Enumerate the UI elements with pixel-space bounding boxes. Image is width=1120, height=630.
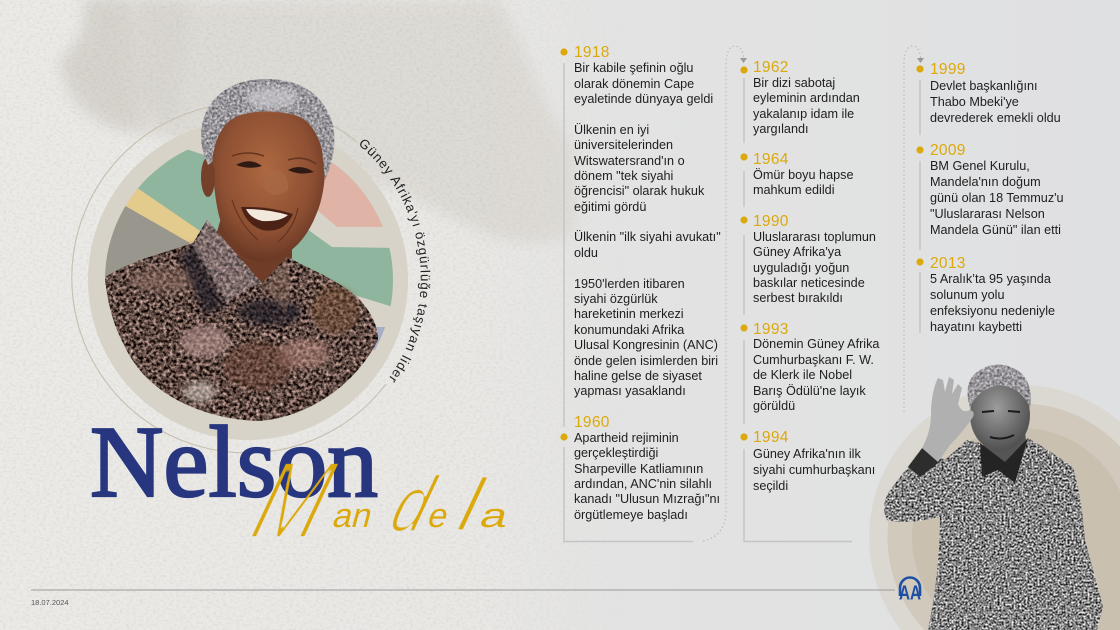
hair [968, 364, 1031, 408]
timeline column 1 text: gerçekleştirdiği [574, 446, 658, 460]
body [884, 438, 1103, 630]
timeline column 1 text: Ulusal Kongresinin (ANC) [574, 338, 718, 352]
timeline column 3 text: Devlet başkanlığını [930, 79, 1038, 93]
timeline column 2 text: görüldü [753, 399, 795, 413]
icon: AA logo [899, 578, 921, 604]
shirt [105, 220, 378, 421]
timeline column 2 text: baskılar neticesinde [753, 276, 865, 290]
timeline column 1 text: örgütlemeye başladı [574, 508, 688, 522]
hand [922, 377, 974, 462]
timeline column 1 text: Ülkenin "ilk siyahi avukatı" [574, 230, 721, 244]
timeline column 2 text: serbest bırakıldı [753, 291, 843, 305]
timeline column 3 text [930, 61, 1064, 334]
shirt patches [129, 243, 359, 403]
beige disc [88, 120, 408, 440]
timeline column 2 text: Bir dizi sabotaj [753, 76, 835, 90]
footer rule [31, 590, 895, 591]
timeline column 2 text: 1962 [753, 59, 789, 76]
portrait: Nelson Mandela smiling [105, 79, 378, 421]
smile [241, 207, 293, 231]
timeline column 3 connectors [904, 46, 924, 412]
timeline column 1 text: haline gelse de siyaset [574, 369, 702, 383]
timeline column 2 text: 1993 [753, 321, 789, 338]
timeline column 1 text: önde gelen isimlerden biri [574, 354, 718, 368]
timeline column 1 text: olarak dönemin Cape [574, 77, 694, 91]
timeline column 1 text: yapması yasaklandı [574, 384, 686, 398]
thin outer ring [72, 103, 386, 453]
neck [982, 425, 1026, 470]
timeline column 1 text: 1960 [574, 414, 610, 431]
hair highlight [246, 87, 298, 109]
title: Mandela: l [444, 463, 500, 546]
timeline column 1 text: Apartheid rejiminin [574, 431, 679, 445]
timeline column 2 text: yakalanıp idam ile [753, 107, 854, 121]
timeline column 1 text: öğrencisi" olarak hukuk [574, 184, 705, 198]
timeline column 1 connectors [560, 46, 747, 542]
timeline column 1 text: eyaletinde dünyaya geldi [574, 92, 713, 106]
title: Mandela: a [476, 496, 514, 534]
timeline column 3 text: günü olan 18 Temmuz'u [930, 191, 1064, 205]
eyes and brows [236, 161, 262, 168]
timeline column 2 text: eyleminin ardından [753, 91, 860, 105]
timeline column 2 text: seçildi [753, 479, 788, 493]
timeline column 1 text: dönem "tek siyahi [574, 169, 673, 183]
timeline column 2 text: Cumhurbaşkanı F. W. [753, 353, 874, 367]
neck [208, 215, 292, 290]
timeline column 3 text: "Uluslararası Nelson [930, 207, 1045, 221]
head [970, 379, 1030, 451]
hair [201, 79, 334, 180]
photo: Mandela waving [884, 364, 1103, 630]
timeline column 2 text: Güney Afrika'nın ilk [753, 447, 861, 461]
timeline column 2 text: uyguladığı yoğun [753, 261, 849, 275]
timeline column 1 text: Sharpeville Katliamının [574, 462, 703, 476]
timeline column 1 text: oldu [574, 246, 598, 260]
timeline column 1 text: 1918 [574, 44, 610, 61]
dark collar [980, 438, 1028, 483]
title: Mandela [232, 438, 514, 561]
timeline column 3 text: 2009 [930, 142, 966, 159]
title: Nelson: Nelson [90, 406, 378, 519]
timeline column 2 text: de Klerk ile Nobel [753, 368, 852, 382]
timeline column 1 text [574, 44, 721, 522]
timeline column 2 text: Ömür boyu hapse [753, 168, 853, 182]
timeline column 2 text: Dönemin Güney Afrika [753, 337, 880, 351]
title: Mandela: e [424, 498, 453, 535]
timeline column 1 text: kanadı "Ulusun Mızrağı"nı [574, 492, 720, 506]
timeline column 2 text: mahkum edildi [753, 183, 834, 197]
title: Mandela: an [329, 498, 377, 535]
timeline column 1 text: hareketinin merkezi [574, 307, 684, 321]
timeline column 3 text: 5 Aralık’ta 95 yaşında [930, 272, 1052, 286]
timeline column 3 text: Mandela'nın doğum [930, 175, 1041, 189]
timeline column 2 text: 1994 [753, 429, 789, 446]
timeline column 1 text: Bir kabile şefinin oğlu [574, 61, 693, 75]
circular caption: Güney Afrika'yı özgürlüğe taşıyan lider [360, 140, 430, 383]
timeline column 2 connectors [740, 66, 852, 542]
timeline column 2 text: 1990 [753, 213, 789, 230]
timeline column 3 text: Thabo Mbeki'ye [930, 95, 1019, 109]
timeline column 1 text: konumundaki Afrika [574, 323, 685, 337]
timeline column 1 text: eğitimi gördü [574, 200, 646, 214]
timeline column 2 text [753, 59, 880, 493]
background paper [0, 0, 578, 630]
timeline column 1 text: ardından, ANC'nin silahlı [574, 477, 712, 491]
timeline column 2 text: yargılandı [753, 122, 809, 136]
timeline column 3 text: hayatını kaybetti [930, 320, 1022, 334]
title: Mandela: M [232, 438, 358, 561]
timeline column 3 text: BM Genel Kurulu, [930, 159, 1030, 173]
timeline column 2 text: Barış Ödülü'ne layık [753, 384, 866, 398]
timeline column 3 text: 1999 [930, 61, 966, 78]
face [212, 108, 325, 262]
title: Mandela: d [376, 460, 452, 548]
timeline column 3 text: Mandela Günü" ilan etti [930, 223, 1061, 237]
timeline column 3 text: solunum yolu [930, 288, 1004, 302]
cuff [908, 447, 942, 477]
timeline column 1 text: 1950'lerden itibaren [574, 277, 685, 291]
timeline column 2 text: siyahi cumhurbaşkanı [753, 463, 875, 477]
concentric circles behind photo [869, 385, 1120, 630]
timeline column 1 text: Ülkenin en iyi [574, 123, 649, 137]
timeline column 3 text: 2013 [930, 255, 966, 272]
timeline column 2 text: Uluslararası toplumun [753, 230, 876, 244]
timeline column 3 text: devrederek emekli oldu [930, 111, 1061, 125]
flag shapes [95, 148, 400, 350]
timeline column 1 text: Witswatersrand'ın o [574, 154, 685, 168]
timeline column 1 text: üniversitelerinden [574, 138, 673, 152]
icon: AA logo: AA [899, 582, 921, 604]
collar [193, 220, 262, 303]
facial features [982, 411, 1020, 439]
timeline column 3 text: enfeksiyonu nedeniyle [930, 304, 1055, 318]
timeline column 1 text: siyahi özgürlük [574, 292, 658, 306]
timeline column 2 text: Güney Afrika'ya [753, 245, 842, 259]
date: 18.07.2024 [31, 598, 69, 607]
ear [201, 157, 215, 197]
timeline column 2 text: 1964 [753, 151, 789, 168]
portrait disc with South African flag [72, 103, 408, 453]
nose [262, 170, 288, 195]
